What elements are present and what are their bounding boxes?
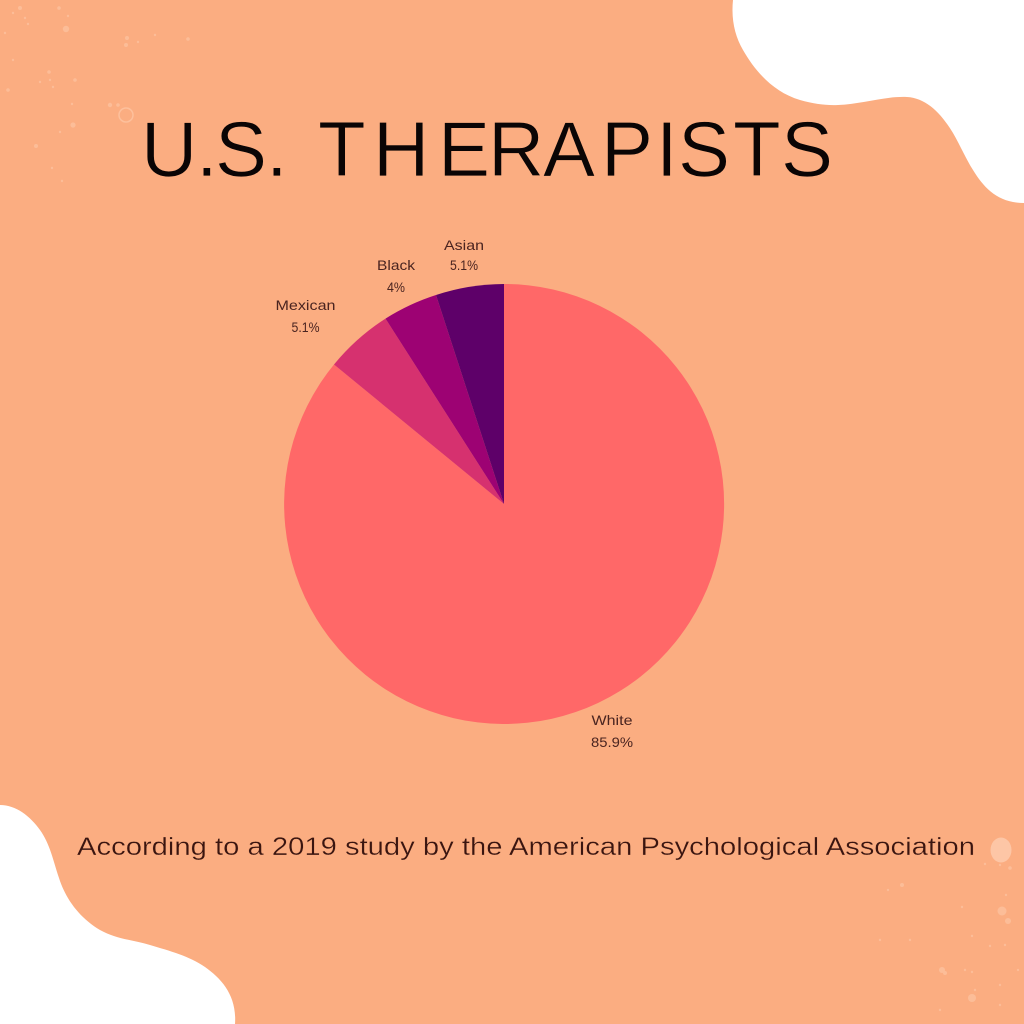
- white blob bottom left: [0, 805, 235, 1024]
- slice: Asian 5.1%: [436, 284, 504, 504]
- caption: According to a 2019 study by the American Psychological Association: [77, 833, 975, 861]
- label: Mexican: Mexican: [276, 297, 336, 313]
- label: White: [591, 712, 633, 750]
- label: Asian: [444, 237, 484, 273]
- slice: White 85.9%: [284, 284, 724, 724]
- label: White: White: [592, 712, 633, 728]
- label: Asian: Asian: [444, 237, 484, 253]
- label: Mexican: [276, 297, 336, 335]
- white blob top right: [732, 0, 1024, 203]
- speckle blob beside caption: [990, 838, 1012, 862]
- label: Black: 4%: [387, 279, 405, 295]
- label: White: 85.9%: [591, 734, 633, 750]
- speckle texture top left: [4, 6, 190, 182]
- speckle texture bottom right: [879, 863, 1019, 1011]
- speckle ring near title: [119, 108, 133, 122]
- label: Asian: 5.1%: [450, 257, 478, 273]
- label: Black: Black: [377, 257, 416, 273]
- label: Mexican: 5.1%: [292, 319, 320, 335]
- title: U.S. THERAPISTS: [141, 105, 833, 193]
- slice: Black 4%: [386, 295, 504, 504]
- label: Black: [377, 257, 416, 295]
- pie chart: [284, 284, 724, 724]
- slice: Mexican 5.1%: [334, 319, 504, 504]
